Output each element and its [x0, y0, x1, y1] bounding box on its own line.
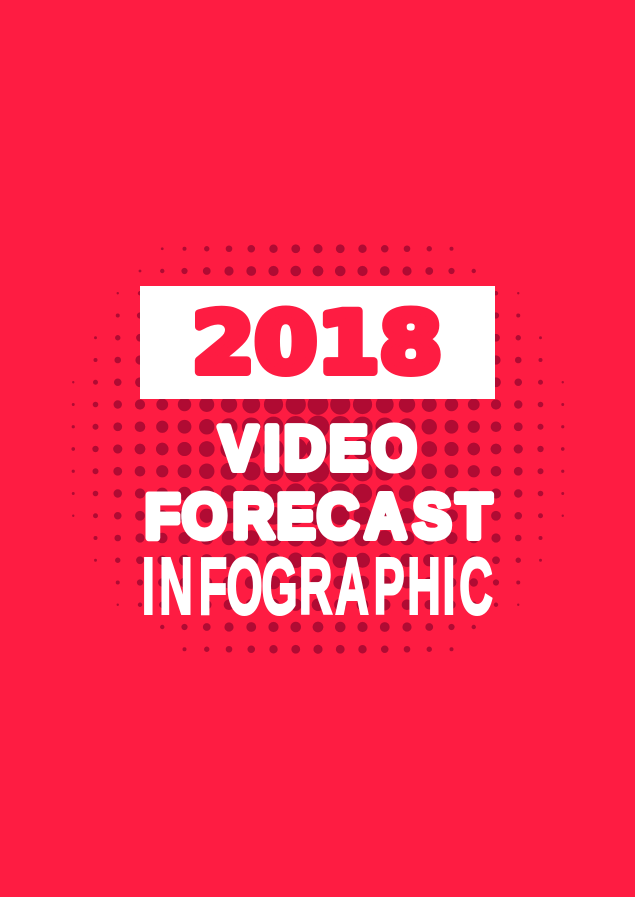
- title block: [142, 413, 493, 631]
- heading: 2018: 2018: [192, 294, 442, 392]
- banner: white box: [140, 286, 495, 399]
- subtitle: INFOGRAPHIC: INFOGRAPHIC: [142, 541, 493, 631]
- year banner: [140, 286, 495, 399]
- title: VIDEO: VIDEO: [219, 413, 416, 483]
- title: FORECAST: FORECAST: [145, 481, 492, 551]
- halftone dot pattern: [72, 245, 564, 653]
